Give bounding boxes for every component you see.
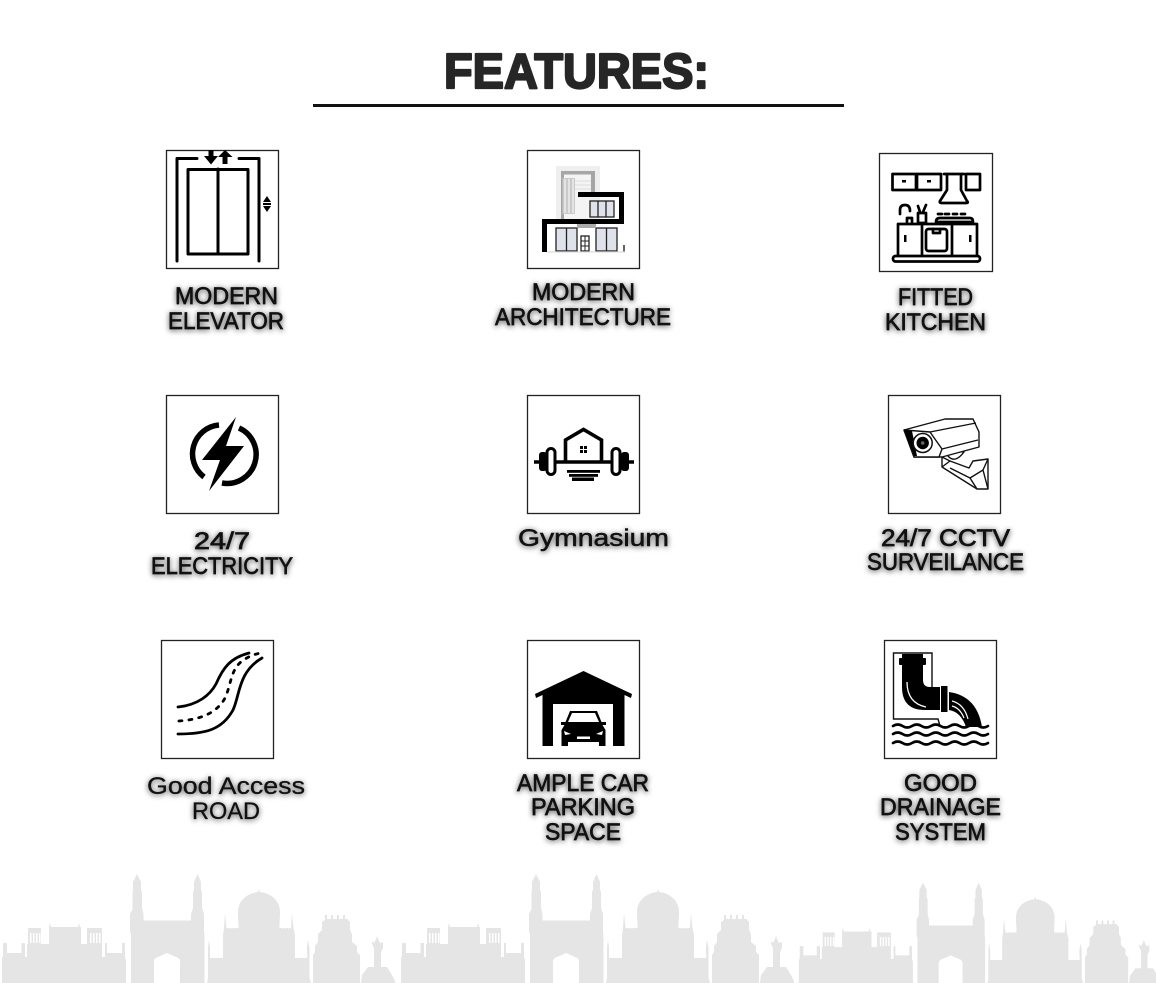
label	[495, 279, 671, 331]
skyline footer	[2, 874, 1156, 983]
label: 24/7	[194, 528, 250, 555]
label	[151, 528, 293, 580]
icon: drain pipe	[884, 640, 996, 758]
panel: electricity	[151, 396, 293, 580]
label: SURVEILANCE	[867, 549, 1024, 576]
label	[517, 770, 649, 846]
panel: modern architecture	[495, 150, 671, 331]
panel: fitted kitchen	[880, 154, 992, 336]
panel: car parking	[517, 640, 649, 846]
panel: access road	[147, 640, 305, 825]
label: PARKING	[531, 794, 635, 821]
panel: gymnasium	[518, 396, 669, 552]
label	[168, 283, 284, 335]
label: AMPLE CAR	[517, 770, 649, 797]
label: KITCHEN	[885, 309, 986, 336]
panel: drainage	[880, 640, 1001, 846]
label: SYSTEM	[895, 819, 986, 846]
label: ELECTRICITY	[151, 553, 293, 580]
label	[867, 525, 1024, 576]
icon: garage with car	[528, 640, 640, 758]
label: ELEVATOR	[168, 308, 284, 335]
icon: modern house	[528, 150, 640, 268]
label	[880, 770, 1001, 846]
label: DRAINAGE	[880, 794, 1001, 821]
icon: lightning bolt	[166, 396, 278, 514]
label: ROAD	[192, 798, 260, 825]
icon: elevator	[166, 150, 278, 268]
label: MODERN	[532, 279, 635, 306]
panel: cctv	[867, 396, 1024, 576]
label: GOOD	[904, 770, 977, 797]
panel: modern elevator	[166, 150, 284, 335]
icon: security camera	[888, 396, 1000, 514]
label	[885, 284, 986, 336]
label: SPACE	[545, 819, 621, 846]
icon: kitchen	[880, 154, 992, 272]
label: 24/7 CCTV	[881, 525, 1010, 552]
label: Good Access	[147, 773, 305, 800]
icon: road	[162, 640, 274, 758]
label: ARCHITECTURE	[495, 304, 671, 331]
title: FEATURES:	[444, 45, 709, 99]
icon: house barbell	[528, 396, 640, 514]
label: FITTED	[898, 284, 973, 311]
label: Gymnasium	[518, 525, 669, 552]
title underline	[313, 104, 844, 107]
label	[147, 773, 305, 825]
label: MODERN	[175, 283, 278, 310]
